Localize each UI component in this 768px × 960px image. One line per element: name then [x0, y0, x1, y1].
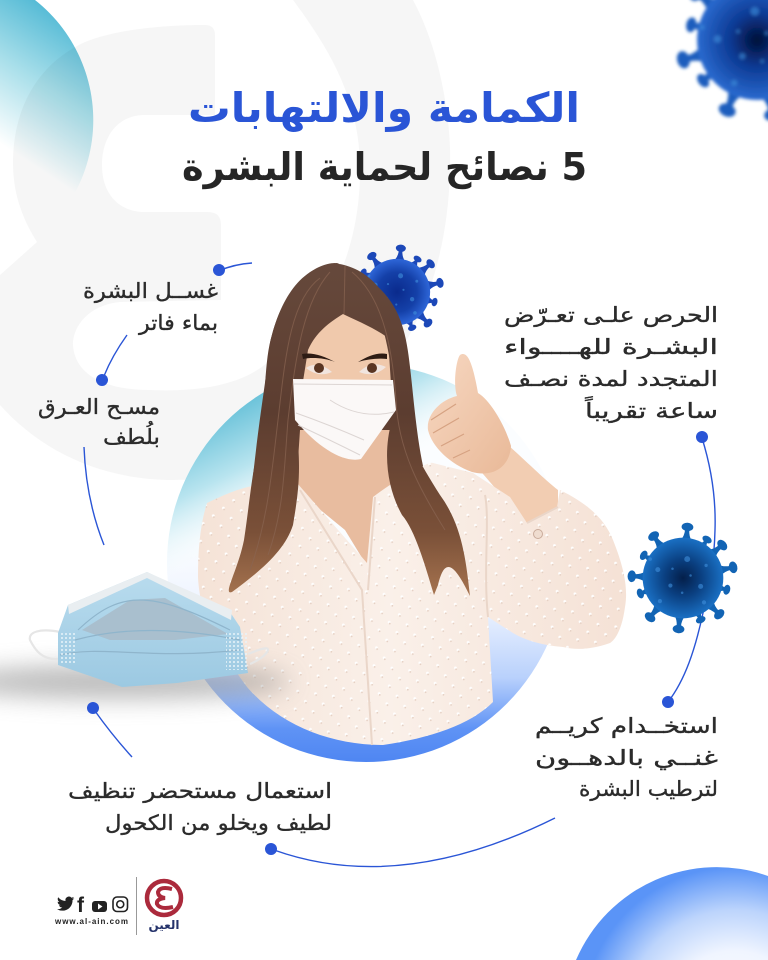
placket and sleeve folds [300, 490, 558, 745]
website url: www.al-ain.com [54, 917, 128, 926]
hair back [230, 263, 470, 593]
title line 2: 5 نصائح لحماية البشرة [182, 145, 587, 189]
logo wordmark: العين [148, 918, 180, 932]
hair strands [250, 266, 445, 570]
connector dots [87, 264, 708, 855]
tip: wipe sweat gently: بلُطف [103, 420, 160, 449]
tip: fresh air exposure: المتجدد لمدة نصـف [504, 367, 718, 391]
mask shadow [0, 665, 290, 699]
icon: twitter [57, 897, 74, 911]
fingers [431, 404, 470, 458]
icon: instagram [113, 897, 128, 912]
tip: rich moisturizing cream: لترطيب البشرة [579, 777, 718, 801]
eyes and brows [302, 353, 387, 374]
logo mark [147, 881, 181, 915]
icon: facebook: f [77, 894, 85, 917]
connector lines [84, 263, 715, 867]
background watermark logo [0, 0, 450, 480]
virus right [627, 522, 738, 634]
vertical divider [136, 877, 137, 935]
tip: rich moisturizing cream [535, 714, 718, 801]
face mask worn [293, 379, 396, 460]
blouse [198, 463, 626, 745]
title line 1: الكمامة والالتهابات [188, 84, 580, 133]
tip: wipe sweat gently: مسـح العـرق [38, 395, 160, 419]
tip: fresh air exposure: الحرص علـى تعـرّض [504, 303, 718, 327]
tip: rich moisturizing cream: غنــي بالدهــون [535, 746, 718, 770]
central gradient circle [167, 364, 565, 762]
virus top right [654, 0, 768, 144]
raised arm and hand [428, 354, 558, 525]
fist [428, 354, 511, 473]
hair front [229, 263, 470, 596]
tip: fresh air exposure: ساعة تقريباً [585, 395, 718, 423]
top edge strip [68, 572, 232, 620]
tip: lukewarm water wash: بماء فاتر [138, 311, 218, 335]
tip: rich moisturizing cream: استخــدام كريــم [535, 714, 718, 739]
tip: lukewarm water wash [83, 279, 218, 335]
tip: wipe sweat gently [38, 395, 160, 449]
tip: gentle alcohol-free cleanser: استعمال مستحضر تنظيف [68, 779, 332, 803]
cuff button [534, 530, 542, 538]
woman with thumbs up [198, 263, 626, 745]
decorative circle bottom right [576, 867, 768, 960]
title [182, 84, 587, 189]
forearm [477, 445, 558, 525]
tip: fresh air exposure: البشـرة للهــــواء [504, 335, 718, 359]
tip: gentle alcohol-free cleanser [68, 779, 332, 835]
surgical mask [30, 572, 268, 687]
tip: fresh air exposure [504, 303, 718, 423]
mask body [58, 572, 248, 687]
ear loops [30, 630, 268, 664]
face [300, 314, 392, 400]
decorative circle top left [0, 0, 93, 261]
icon: youtube [92, 901, 107, 912]
tip: gentle alcohol-free cleanser: لطيف ويخلو من الكحول [105, 811, 332, 835]
pleats [60, 598, 240, 655]
stitched side bands [59, 632, 76, 665]
tip: lukewarm water wash: غســل البشرة [83, 279, 218, 303]
footer branding [54, 877, 181, 935]
virus behind head [349, 244, 445, 340]
neck and chest [296, 430, 396, 566]
